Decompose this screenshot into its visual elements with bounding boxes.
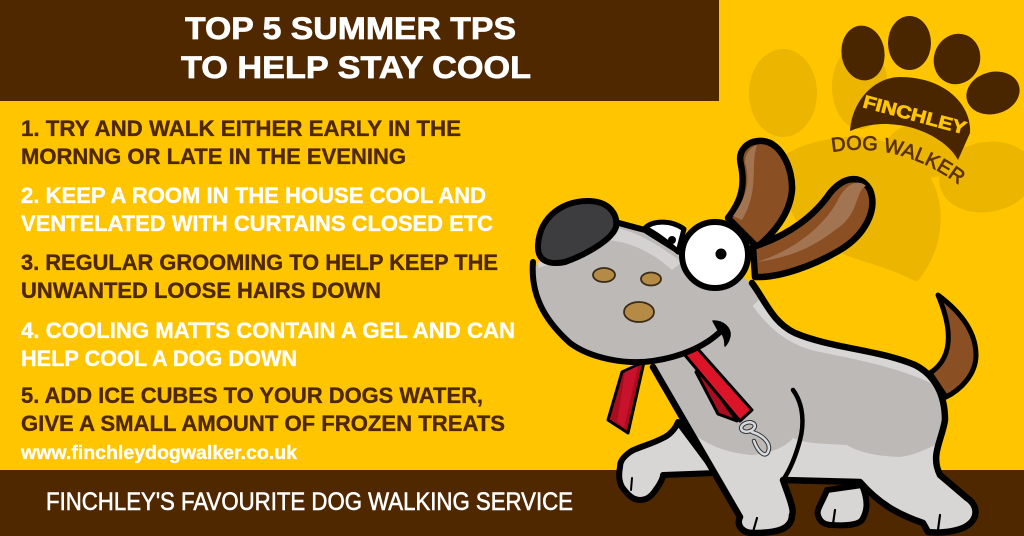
title: TO HELP STAY COOL [181, 49, 531, 85]
toe lines [753, 510, 940, 532]
nose [538, 201, 616, 263]
logo: dark paw [832, 16, 1020, 185]
left leash strap [608, 362, 644, 433]
far ear [728, 141, 792, 247]
head [533, 222, 764, 362]
title: TOP 5 SUMMER TPS [185, 10, 516, 46]
footer band [0, 470, 1024, 536]
near ear [753, 179, 872, 277]
tips list [21, 116, 515, 436]
leash clip [740, 421, 769, 454]
tip 1 [21, 116, 461, 169]
smile [713, 321, 730, 346]
right leash strap and clip [684, 348, 769, 454]
lower belly shade [697, 436, 972, 530]
far eye [645, 222, 684, 252]
tip 5: 5. ADD ICE CUBES TO YOUR DOGS WATER, [21, 383, 483, 408]
tip 1: MORNNG OR LATE IN THE EVENING [21, 144, 406, 169]
tip 3: 3. REGULAR GROOMING TO HELP KEEP THE [21, 250, 498, 275]
tip 4: HELP COOL A DOG DOWN [21, 346, 297, 371]
far hind paw [818, 485, 866, 525]
tip 2: VENTELATED WITH CURTAINS CLOSED ETC [21, 211, 493, 236]
near eye [682, 222, 748, 288]
tip 2 [21, 183, 493, 236]
tip 1: 1. TRY AND WALK EITHER EARLY IN THE [21, 116, 461, 141]
tip 4 [21, 318, 515, 371]
freckles [593, 268, 661, 322]
tip 2: 2. KEEP A ROOM IN THE HOUSE COOL AND [21, 183, 486, 208]
tip 5: GIVE A SMALL AMOUNT OF FROZEN TREATS [21, 411, 505, 436]
body outline [653, 283, 976, 533]
title [181, 10, 531, 85]
tip 4: 4. COOLING MATTS CONTAIN A GEL AND CAN [21, 318, 515, 343]
chest line [783, 390, 802, 480]
raised front paw [619, 422, 716, 500]
logo: faint paw watermark [749, 45, 1024, 282]
tail [930, 295, 976, 397]
tip 3: UNWANTED LOOSE HAIRS DOWN [21, 278, 381, 303]
tip 3 [21, 250, 498, 303]
dog illustration [533, 141, 990, 536]
body [656, 300, 972, 530]
back highlight [752, 300, 932, 384]
logo text: FINCHLEY [861, 92, 969, 138]
header band [0, 0, 719, 101]
tip 5 [21, 383, 505, 436]
website url: www.finchleydogwalker.co.uk [20, 443, 297, 464]
logo subtitle: DOG WALKER [832, 136, 964, 185]
head outline [533, 222, 722, 362]
footer slogan: FINCHLEY'S FAVOURITE DOG WALKING SERVICE [46, 488, 573, 516]
